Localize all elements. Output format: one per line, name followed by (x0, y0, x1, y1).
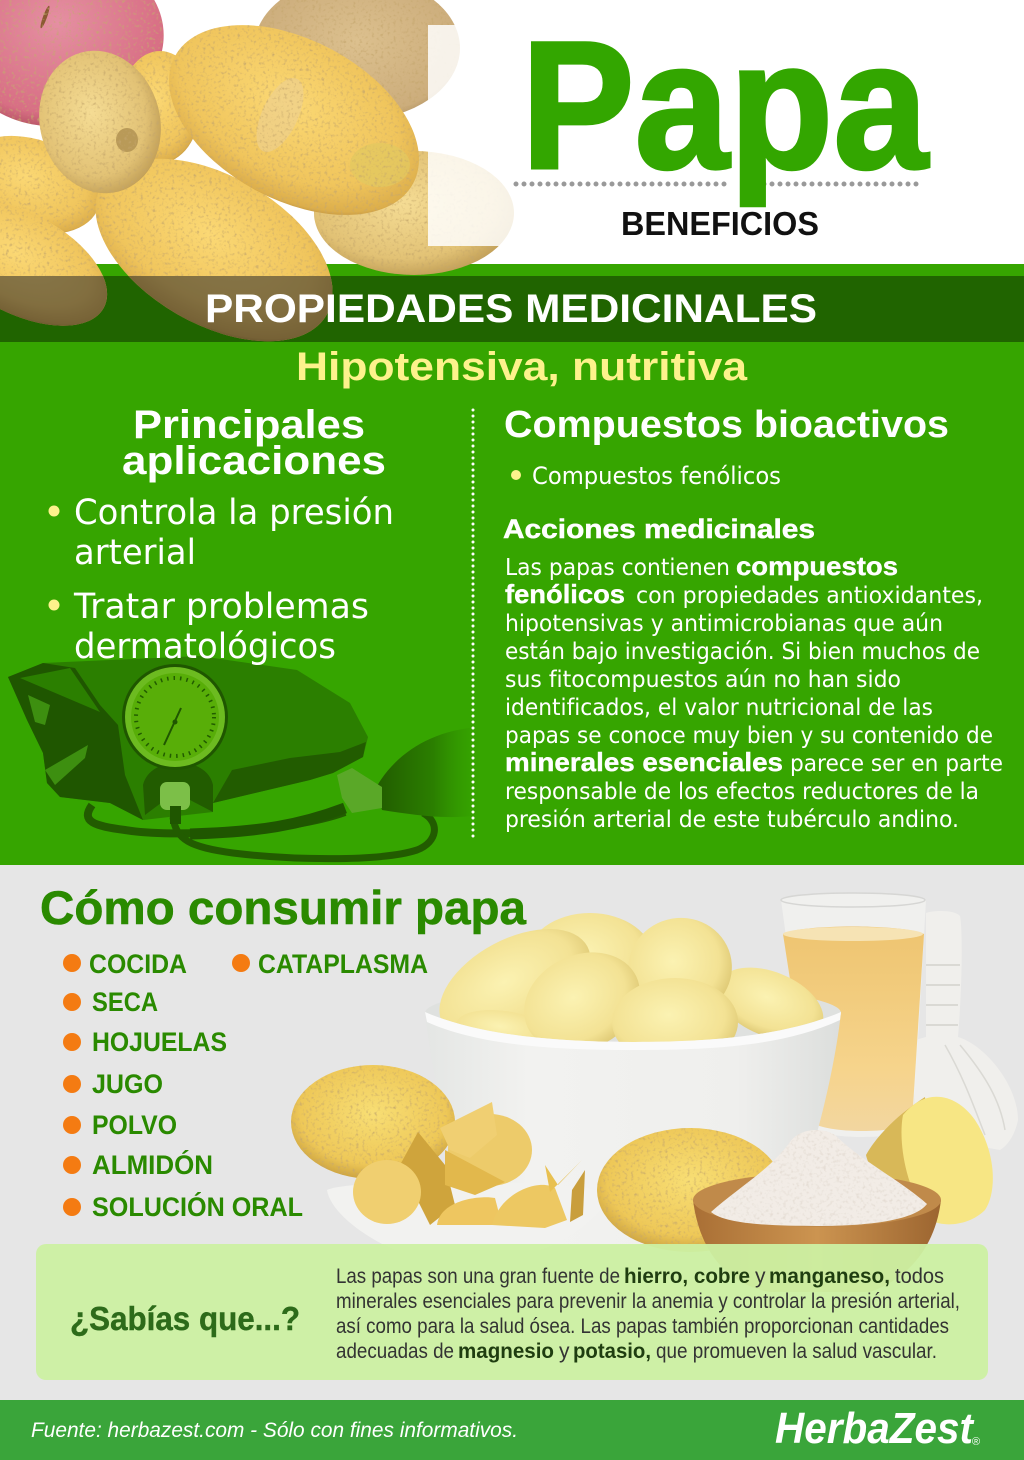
text: medicinal actions paragraph: papas se conoce muy bien y su contenido de (505, 723, 993, 749)
image: pile of potatoes (0, 0, 514, 342)
panel: medicinal properties green background (0, 264, 1024, 865)
heading: Acciones medicinales: Acciones medicinales (503, 514, 815, 544)
list: compounds: Compuestos fenólicos (532, 462, 781, 490)
text: medicinal actions paragraph: responsable de los efectos reductores de la (505, 779, 979, 805)
logo: HerbaZest: HerbaZest (775, 1404, 975, 1453)
heading band (0, 276, 1024, 342)
text: medicinal actions paragraph: presión arterial de este tubérculo andino. (505, 807, 959, 833)
text: medicinal actions paragraph (505, 551, 1003, 833)
image: glass of potato juice (781, 892, 926, 1137)
callout text: y (559, 1340, 570, 1363)
text: medicinal actions paragraph: con propiedades antioxidantes, (636, 583, 983, 609)
text: medicinal actions paragraph: hipotensivas y antimicrobianas que aún (505, 611, 943, 637)
footer bar (0, 1400, 1024, 1460)
list: forms of consumption: SOLUCIÓN ORAL (92, 1191, 303, 1222)
text: medicinal actions paragraph: están bajo investigación. Si bien muchos de (505, 639, 980, 665)
list: forms of consumption: COCIDA (89, 949, 187, 979)
text: medicinal actions paragraph: fenólicos (505, 579, 625, 609)
callout text: todos (895, 1265, 944, 1288)
list: applications: arterial (74, 533, 196, 573)
heading: Cómo consumir papa: Cómo consumir papa (40, 881, 527, 934)
callout: did you know box (36, 1244, 988, 1380)
heading: Principales aplicaciones (122, 403, 386, 483)
heading: Propiedades medicinales: PROPIEDADES MEDICINALES (205, 287, 817, 331)
list: applications: dermatológicos (74, 627, 336, 667)
callout text: que promueven la salud vascular. (656, 1340, 937, 1363)
callout text: y (755, 1265, 766, 1288)
image: poultice (915, 911, 1018, 1150)
background: white header (0, 0, 1024, 264)
list: applications: Controla la presión (74, 493, 394, 533)
image: cut potato (866, 1097, 993, 1224)
callout text: Las papas son una gran fuente de (336, 1265, 620, 1288)
image: bowl of potato chips (327, 1102, 608, 1250)
text: medicinal actions paragraph: Las papas contienen (505, 555, 730, 581)
callout text: hierro, cobre (624, 1265, 750, 1288)
image: bowl of peeled potatoes (421, 906, 841, 1245)
heading: Compuestos bioactivos: Compuestos bioactivos (504, 404, 949, 446)
logo: HerbaZest: ® (972, 1436, 980, 1448)
heading: Principales aplicaciones: aplicaciones (122, 439, 386, 483)
callout text: así como para la salud ósea. Las papas también proporcionan cantidades (336, 1315, 949, 1338)
text: medicinal actions paragraph: parece ser en parte (790, 751, 1003, 777)
image: blood pressure cuff (8, 656, 480, 859)
image: raw potato right (597, 1128, 783, 1252)
dotted divider under title (516, 182, 920, 186)
list: forms of consumption: CATAPLASMA (258, 949, 428, 979)
list: forms of consumption (63, 949, 428, 1222)
vertical dotted divider (472, 410, 474, 840)
list: applications: Tratar problemas (73, 587, 369, 627)
text: medicinal actions paragraph: sus fitocompuestos aún no han sido (505, 667, 901, 693)
footer source text: Fuente: herbazest.com - Sólo con fines informativos. (31, 1419, 518, 1442)
subtitle: Beneficios: BENEFICIOS (621, 205, 819, 242)
text: medicinal actions paragraph: identificados, el valor nutricional de las (505, 695, 933, 721)
callout text (336, 1265, 960, 1363)
list: forms of consumption: POLVO (92, 1110, 177, 1140)
list: forms of consumption: JUGO (92, 1069, 163, 1099)
subheading: Hipotensiva, nutritiva: Hipotensiva, nutritiva (296, 345, 748, 389)
list: applications (48, 493, 394, 667)
image: wooden bowl of flour (693, 1130, 941, 1292)
text: medicinal actions paragraph: compuestos (736, 551, 898, 581)
image: raw potato left (291, 1065, 455, 1179)
callout text: potasio, (573, 1340, 651, 1363)
title: Papa: Papa (521, 3, 930, 207)
callout text: magnesio (458, 1340, 554, 1363)
list: forms of consumption: HOJUELAS (92, 1027, 227, 1057)
callout heading: ¿Sabías que...? (70, 1300, 300, 1337)
list: forms of consumption: ALMIDÓN (92, 1149, 213, 1180)
callout text: manganeso, (769, 1265, 890, 1288)
text: medicinal actions paragraph: minerales esenciales (505, 747, 783, 777)
panel: how to consume background (0, 865, 1024, 1400)
callout text: minerales esenciales para prevenir la anemia y controlar la presión arterial, (336, 1290, 960, 1313)
list: forms of consumption: SECA (92, 987, 158, 1017)
callout text: adecuadas de (336, 1340, 454, 1363)
heading: Principales aplicaciones: Principales (133, 403, 365, 447)
